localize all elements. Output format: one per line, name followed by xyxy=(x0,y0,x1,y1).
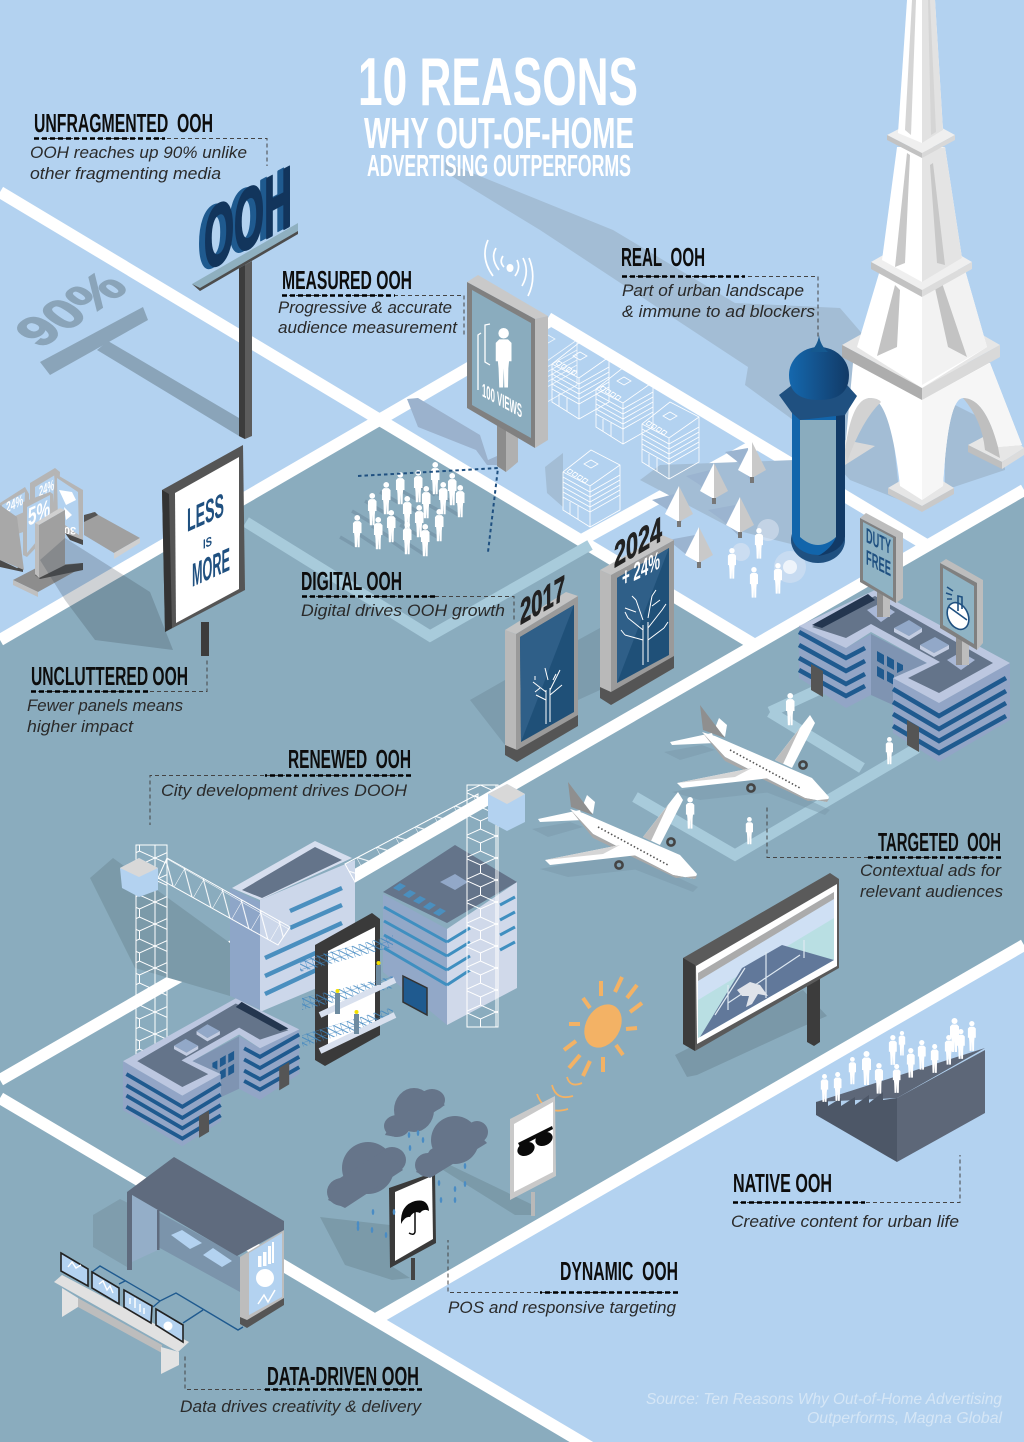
billboard: less is more: LESS xyxy=(187,487,224,540)
callout: unfragmented: other fragmenting media xyxy=(30,164,221,183)
callout: unfragmented: OOH reaches up 90% unlike xyxy=(30,143,247,162)
pale road markings xyxy=(246,522,917,855)
callout: measured: Progressive & accurate xyxy=(278,298,452,317)
callout: dynamic: POS and responsive targeting xyxy=(448,1298,677,1317)
rain clouds xyxy=(327,1088,488,1208)
sign: umbrella xyxy=(389,1172,436,1280)
sign shadows xyxy=(320,1165,533,1280)
callout: measured xyxy=(278,265,464,337)
callout: uncluttered xyxy=(27,660,207,736)
sign: sunglasses xyxy=(510,1096,556,1216)
icon: signal waves xyxy=(485,240,533,296)
teal district: central xyxy=(0,420,750,1080)
billboard: 2017: 2017 xyxy=(520,568,565,633)
callout: targeted: Contextual ads for xyxy=(860,861,1002,880)
low building xyxy=(123,998,299,1146)
billboard: less is more: IS xyxy=(203,534,212,552)
billboard: measured audience xyxy=(467,275,548,472)
sign: mouse click xyxy=(940,559,983,670)
crane left xyxy=(120,845,290,1057)
bus shelter shadow xyxy=(93,1199,132,1270)
callout: data-driven: DATA-DRIVEN OOH xyxy=(267,1361,419,1391)
callout: dynamic xyxy=(448,1240,678,1317)
white outlined buildings xyxy=(520,325,699,527)
teal district: lower xyxy=(0,490,1024,1442)
callout: uncluttered: higher impact xyxy=(27,717,134,736)
building: solar roof office xyxy=(383,845,517,1025)
callout: digital: Digital drives OOH growth xyxy=(301,601,505,620)
billboard shadow: measured xyxy=(407,398,497,465)
sun icon xyxy=(537,977,642,1111)
morris column xyxy=(779,335,857,563)
source note: Outperforms, Magna Global xyxy=(807,1410,1002,1427)
bus shelter xyxy=(127,1157,284,1328)
callout: native: Creative content for urban life xyxy=(731,1212,959,1231)
billboard under construction xyxy=(300,913,395,1066)
board shadows: 2017 and 2024 xyxy=(470,628,600,745)
sign: duty free xyxy=(860,513,903,622)
title: WHY OUT-OF-HOME xyxy=(364,109,634,158)
callout: measured: MEASURED OOH xyxy=(282,265,412,295)
callout: digital: DIGITAL OOH xyxy=(301,566,402,596)
eiffel tower xyxy=(842,0,1024,512)
source note: Source: Ten Reasons Why Out-of-Home Advertising xyxy=(646,1391,1002,1408)
callout: dynamic: DYNAMIC OOH xyxy=(560,1256,678,1286)
raindrops xyxy=(357,1130,466,1238)
callout: native xyxy=(731,1155,960,1231)
building: tall office xyxy=(230,841,355,1012)
airplane lower xyxy=(532,782,698,892)
OOH pole sign: OOH xyxy=(198,149,286,293)
data cables xyxy=(92,1266,243,1330)
billboard: 2024: 2024 xyxy=(614,510,662,576)
building shadow xyxy=(545,453,563,507)
crowd on stairs xyxy=(821,1018,976,1102)
small panel cluster: 30 xyxy=(64,524,76,536)
native staircase block xyxy=(816,1048,985,1162)
callout: measured: audience measurement xyxy=(278,318,458,337)
callout: real: Part of urban landscape xyxy=(622,281,804,300)
tree shadows xyxy=(652,448,750,565)
title xyxy=(358,44,638,183)
90 percent shadow: 90% xyxy=(4,264,140,356)
billboard: 2024: + 24% xyxy=(622,545,660,593)
sign: duty free: DUTY xyxy=(866,523,891,559)
small panel cluster: 24% xyxy=(39,477,54,501)
callout: unfragmented xyxy=(30,108,267,183)
small panel cluster: 5% xyxy=(28,493,50,532)
callout: renewed xyxy=(150,744,411,825)
callout: unfragmented: UNFRAGMENTED OOH xyxy=(34,108,213,138)
source note xyxy=(646,1391,1002,1427)
callout: data-driven: Data drives creativity & delivery xyxy=(180,1397,423,1416)
crane shadow xyxy=(90,858,230,996)
callout: real: REAL OOH xyxy=(621,242,705,272)
text: OOH xyxy=(204,147,292,291)
callout: uncluttered: UNCLUTTERED OOH xyxy=(31,661,188,691)
title: 10 REASONS xyxy=(358,44,638,120)
callout: digital xyxy=(301,566,514,622)
billboard: less is more: MORE xyxy=(192,541,230,595)
billboard shadow: tennis xyxy=(675,990,827,1077)
callout: uncluttered: Fewer panels means xyxy=(27,696,183,715)
callout: targeted xyxy=(767,805,1003,901)
crowd of people xyxy=(353,462,464,556)
callout: renewed: City development drives DOOH xyxy=(161,781,408,800)
sign: duty free: FREE xyxy=(866,545,891,581)
desk with monitors xyxy=(54,1253,189,1374)
people with phones xyxy=(728,519,806,598)
callout: renewed: RENEWED OOH xyxy=(288,744,411,774)
column shadow on plaza xyxy=(640,460,795,545)
billboard: less is more xyxy=(162,445,245,656)
small panel cluster: 24% xyxy=(6,492,23,517)
OOH pole sign xyxy=(192,147,298,439)
crowd shadows xyxy=(340,485,460,555)
billboard: measured audience: 100 VIEWS xyxy=(482,380,522,423)
callout: real: & immune to ad blockers xyxy=(622,302,816,321)
airport building xyxy=(799,590,1010,762)
panel shadow: left cluster and less is more xyxy=(40,538,173,650)
billboard: tennis xyxy=(683,873,839,1051)
billboard: 2024 xyxy=(600,510,674,705)
90 percent shadow xyxy=(4,264,239,436)
trees xyxy=(665,442,766,568)
callout: targeted: relevant audiences xyxy=(860,882,1003,901)
billboard: 2017 xyxy=(505,568,578,762)
small panel cluster xyxy=(0,468,140,597)
airplane upper xyxy=(664,705,830,815)
eiffel tower shadow xyxy=(445,162,1005,500)
callout: real xyxy=(621,242,818,338)
crane right xyxy=(345,784,525,1027)
airport passengers xyxy=(686,693,893,844)
title: ADVERTISING OUTPERFORMS xyxy=(367,148,631,183)
callout: data-driven xyxy=(180,1355,423,1416)
callout: native: NATIVE OOH xyxy=(733,1168,832,1198)
dotted measurement line xyxy=(358,468,498,552)
